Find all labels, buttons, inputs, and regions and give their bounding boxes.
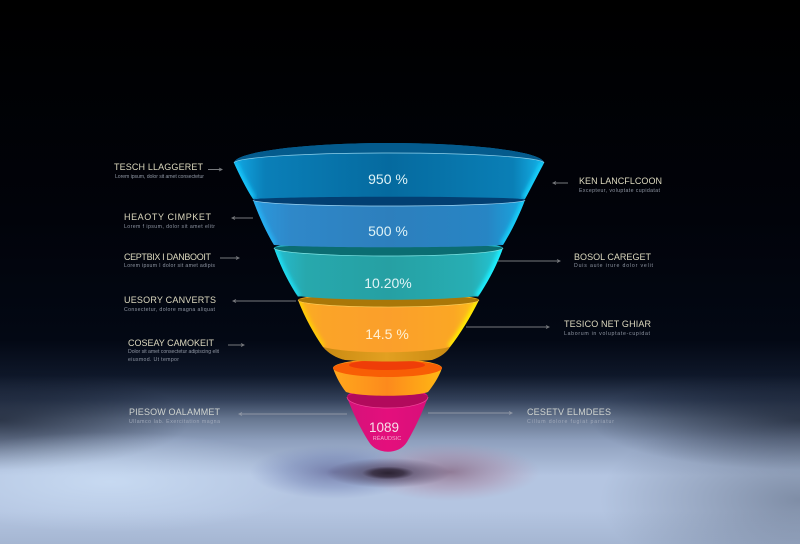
value: 1089: 1089 [369,420,399,435]
left label 6: PIESOW OALAMMET [129,407,220,417]
arrow [208,168,222,171]
right label 1 [553,176,662,194]
right label 2: Duis aute irure dolor velit [574,263,654,269]
funnel tier 5: orange [333,359,442,396]
left label 4 [124,295,296,313]
left label 5: COSEAY CAMOKEIT [128,338,214,348]
arrow [239,412,347,416]
left label 4: Consectetur, dolore magna aliquat [124,307,216,313]
left label 2: Lorem f ipsum, dolor sit amet elitr [124,224,215,230]
left label 3: Lorem ipsum I dolor sit amet adipis [124,263,215,269]
funnel tier 2: blue [253,193,525,247]
arrow [498,260,560,262]
value: 500 %: 500 % [368,223,408,239]
value: 14.5%: 14.5 % [365,326,409,342]
left label 1: Lorem ipsum, dolor sit amet consectetur [115,174,204,180]
value: 950 %: 950 % [368,171,408,187]
funnel [234,143,544,452]
arrow [220,256,239,260]
funnel tier 1: deep blue [234,143,544,199]
right label 4 [428,407,614,425]
left label 6 [129,407,347,425]
right label 3: Laborum in voluptate-cupidat [564,331,651,337]
right label 4: CESETV ELMDEES [527,407,611,417]
left label 6: Ullamco lab. Exercitation magna [129,419,220,425]
funnel tier 4: amber [298,293,479,362]
caption: tier 6: RÉAUDSIC [373,435,401,442]
right label 3: TESICO NET GHIAR [564,319,652,329]
right label 1: KEN LANCFLCOON [579,176,662,186]
left label 1 [114,162,222,180]
left label 3 [124,252,239,269]
funnel tier 3: teal [274,240,503,300]
arrow [233,300,296,302]
arrow [428,412,512,414]
left label 3: CEPTBIX I DANBOOIT [124,252,212,262]
funnel tier 6: magenta [347,387,428,452]
value: 10.20%: 10.20% [364,275,412,291]
right label 4: Cillum dolore fugiat pariatur [527,419,614,425]
left label 4: UESORY CANVERTS [124,295,216,305]
left label 5: Dolor sit amet consectetur adipiscing elit [128,349,220,355]
floor glow and shadow [0,370,800,544]
right label 1: Excepteur, voluptate cupidatat [579,188,661,194]
right label 3 [466,319,652,337]
left label 5 [128,338,244,363]
left label 5: eiusmod. Ut tempor [128,357,179,363]
right label 2: BOSOL CAREGET [574,252,652,262]
left label 2: HEAOTY CIMPKET [124,212,212,222]
right label 2 [498,252,654,269]
left label 2 [124,212,253,230]
left label 1: TESCH LLAGGERET [114,162,204,172]
arrow [553,182,568,184]
arrow [228,344,244,346]
arrow [466,326,549,328]
arrow [232,216,253,220]
